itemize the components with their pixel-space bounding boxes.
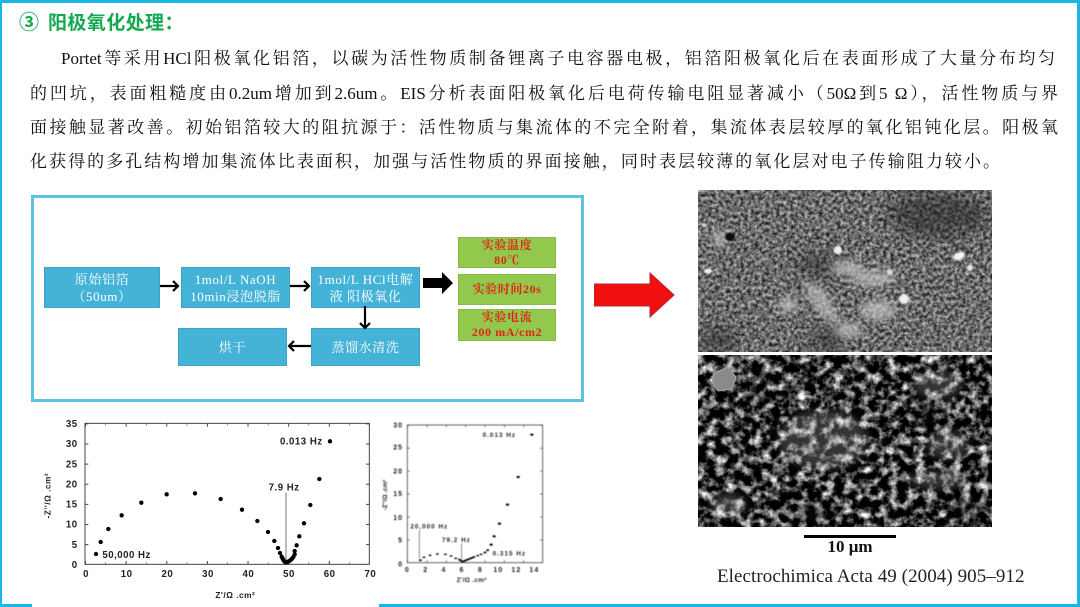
chart: impedance of anodized foil: 20 <box>393 468 403 475</box>
chart: impedance of anodized foil: 4 <box>442 567 446 574</box>
step: drying: 烘干 <box>219 340 246 354</box>
SEM image: anodized foil <box>698 355 992 527</box>
chart: impedance of anodized foil: 20,000 Hz <box>410 524 448 531</box>
chart: impedance of anodized foil: 8 <box>478 567 483 574</box>
step: HCl anodizing: 液 阳极氧化 <box>330 288 401 304</box>
chart: impedance of anodized foil: 25 <box>393 445 403 452</box>
condition: temperature <box>458 237 556 268</box>
condition: temperature: 80℃ <box>494 252 520 266</box>
chart: impedance of anodized foil: 10 <box>393 515 403 522</box>
chart: impedance of untreated foil: 20 <box>66 479 78 490</box>
body paragraph: 面接触显著改善。初始铝箔较大的阻抗源于：活性物质与集流体的不完全附着，集流体表层较厚的氧化铝钝化层。阳极氧 <box>30 118 1058 137</box>
chart: impedance of untreated foil: 10 <box>121 569 133 580</box>
chart: impedance of untreated foil: 0.013 Hz <box>280 437 323 448</box>
chart: impedance of untreated foil: 5 <box>72 540 78 551</box>
chart: impedance of anodized foil: 2 <box>423 567 428 574</box>
chart: impedance of untreated foil: 30 <box>66 439 78 450</box>
chart: impedance of untreated foil: 0 <box>83 569 89 580</box>
body paragraph: 的凹坑，表面粗糙度由0.2um增加到2.6um。EIS分析表面阳极氧化后电荷传输电阻显著减小（50Ω到5 Ω），活性物质与界 <box>30 84 1058 103</box>
step: distilled water rinse <box>311 328 420 366</box>
chart: impedance of anodized foil: 6 <box>460 567 464 574</box>
title: 阳极氧化处理： <box>48 13 184 34</box>
scale label: 10 μm <box>827 537 873 556</box>
scale bar <box>804 535 896 538</box>
chart: impedance of anodized foil <box>382 422 544 584</box>
panel: process flow <box>31 195 584 402</box>
chart: impedance of untreated foil: 50,000 Hz <box>102 550 151 561</box>
chart: impedance of untreated foil: 60 <box>324 569 336 580</box>
chart: impedance of untreated foil: 0 <box>72 560 78 571</box>
condition: current <box>458 309 556 341</box>
chart: impedance of anodized foil: 5 <box>398 538 403 545</box>
step: raw aluminium foil <box>44 267 160 308</box>
chart: impedance of untreated foil: 20 <box>161 569 173 580</box>
chart: impedance of untreated foil: 25 <box>66 459 78 470</box>
chart: impedance of anodized foil: 79.2 Hz <box>442 537 471 544</box>
chart: impedance of anodized foil: 12 <box>511 567 521 574</box>
condition: current: 200 mA/cm2 <box>472 325 542 339</box>
step: HCl anodizing: 1mol/L HCl电解 <box>318 272 413 286</box>
chart: impedance of untreated foil: 30 <box>202 569 214 580</box>
chart: impedance of anodized foil: 0.013 Hz <box>483 432 516 439</box>
condition: temperature: 实验温度 <box>482 238 532 252</box>
red arrow <box>594 272 675 318</box>
chart: impedance of untreated foil: -Z''/Ω .cm² <box>43 473 53 519</box>
chart: impedance of anodized foil: 0 <box>405 567 410 574</box>
body paragraph: Portet等采用HCl阳极氧化铝箔，以碳为活性物质制备锂离子电容器电极，铝箔阳极氧化后在表面形成了大量分布均匀 <box>61 49 1055 68</box>
chart: impedance of untreated foil: 35 <box>66 419 78 430</box>
chart: impedance of untreated foil: 70 <box>364 569 376 580</box>
step: distilled water rinse: 蒸馏水清洗 <box>331 340 400 354</box>
body paragraph: 化获得的多孔结构增加集流体比表面积，加强与活性物质的界面接触，同时表层较薄的氧化层对电子传输阻力较小。 <box>30 152 1000 171</box>
chart: impedance of untreated foil: Z'/Ω .cm² <box>215 590 255 600</box>
citation: Electrochimica Acta 49 (2004) 905–912 <box>717 566 1025 587</box>
chart: impedance of anodized foil: -Z''/Ω .cm² <box>382 480 389 510</box>
step: raw aluminium foil: 原始铝箔 <box>75 272 129 286</box>
condition: current: 实验电流 <box>482 310 532 324</box>
chart: impedance of anodized foil: 14 <box>529 567 539 574</box>
chart: impedance of untreated foil: 40 <box>242 569 254 580</box>
chart: impedance of untreated foil: 50 <box>283 569 295 580</box>
step: NaOH degreasing <box>181 267 290 308</box>
chart: impedance of untreated foil <box>43 419 376 600</box>
chart: impedance of untreated foil: 7.9 Hz <box>269 483 300 494</box>
step: drying <box>178 328 287 366</box>
title: ③ <box>19 12 39 34</box>
chart: impedance of anodized foil: 30 <box>393 422 403 429</box>
step: raw aluminium foil: （50um） <box>72 288 132 304</box>
chart: impedance of anodized foil: Z'/Ω .cm² <box>457 577 487 584</box>
condition: time: 实验时间20s <box>473 282 541 296</box>
step: HCl anodizing <box>311 267 420 308</box>
step: NaOH degreasing: 10min浸泡脱脂 <box>190 288 281 304</box>
condition: time <box>458 274 556 305</box>
step: NaOH degreasing: 1mol/L NaOH <box>195 272 276 286</box>
SEM image: untreated foil <box>698 190 992 352</box>
hexagonal crystal <box>712 367 736 391</box>
chart: impedance of anodized foil: 10 <box>493 567 503 574</box>
chart: impedance of untreated foil: 15 <box>66 500 78 511</box>
body paragraph <box>30 49 1058 171</box>
chart: impedance of anodized foil: 0.315 Hz <box>493 550 526 557</box>
chart background covering bottom border <box>32 600 379 607</box>
chart: impedance of anodized foil: 15 <box>393 491 403 498</box>
chart: impedance of anodized foil: 0 <box>398 562 403 569</box>
chart: impedance of untreated foil: 10 <box>66 520 78 531</box>
